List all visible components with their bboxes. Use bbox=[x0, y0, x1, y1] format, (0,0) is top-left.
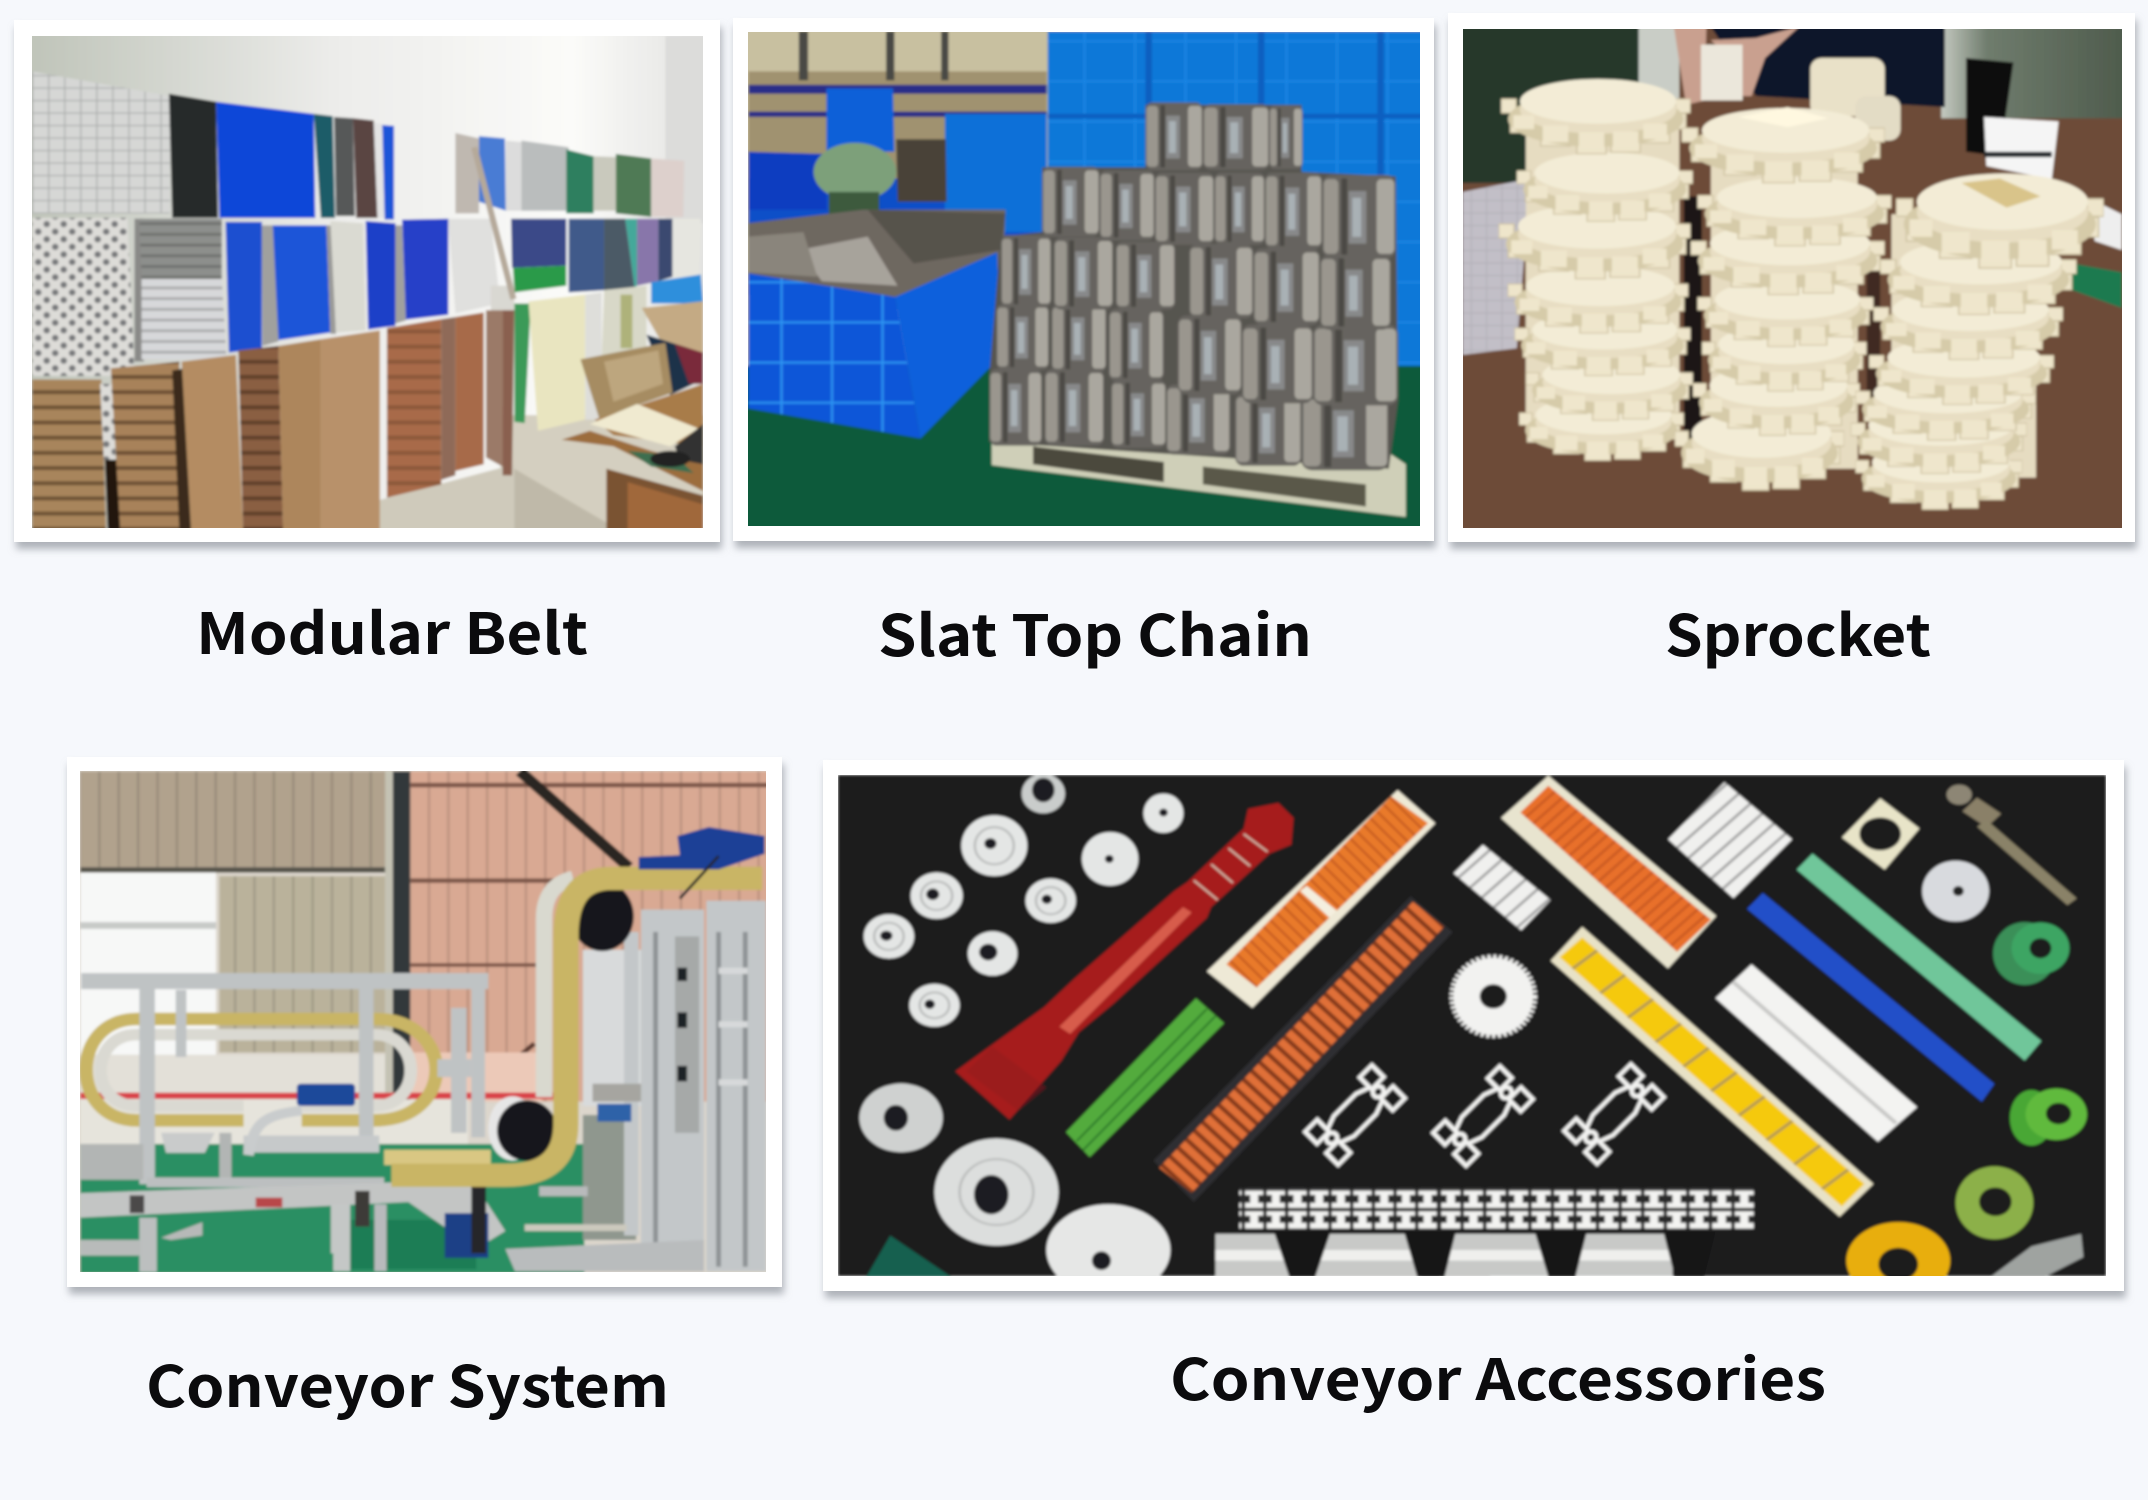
photo frame bbox=[1448, 13, 2135, 542]
photo: stacked chains and blue crates bbox=[744, 29, 1424, 529]
photo frame bbox=[823, 760, 2124, 1291]
label: conveyor accessories: Conveyor Accessories bbox=[1170, 1335, 1826, 1417]
photo: stacks of cream sprockets bbox=[1458, 27, 2126, 531]
right half of accessories bbox=[1422, 776, 2087, 1299]
photo frame bbox=[67, 757, 782, 1287]
photo: modular belt samples on wall bbox=[28, 31, 708, 531]
photo: assorted conveyor accessories on black bbox=[838, 774, 2106, 1299]
photo frame bbox=[733, 18, 1434, 541]
label: modular belt: Modular Belt bbox=[196, 589, 588, 671]
aluminum profile 3 bbox=[1564, 1064, 1664, 1164]
photo: conveyor system in factory bbox=[74, 767, 772, 1276]
panel: sprocket bbox=[1448, 13, 2135, 673]
label: conveyor system: Conveyor System bbox=[146, 1342, 669, 1424]
left half of accessories bbox=[859, 774, 1490, 1296]
panel: modular belt bbox=[14, 20, 720, 671]
label: sprocket: Sprocket bbox=[1665, 591, 1931, 673]
aluminum profile 1 bbox=[1305, 1065, 1405, 1165]
panel: conveyor system bbox=[67, 757, 782, 1424]
photo frame bbox=[14, 20, 720, 542]
aluminum profile 2 bbox=[1433, 1066, 1533, 1166]
panel: conveyor accessories bbox=[823, 760, 2124, 1417]
label: slat top chain: Slat Top Chain bbox=[878, 591, 1312, 673]
panel: slat top chain bbox=[733, 18, 1434, 673]
